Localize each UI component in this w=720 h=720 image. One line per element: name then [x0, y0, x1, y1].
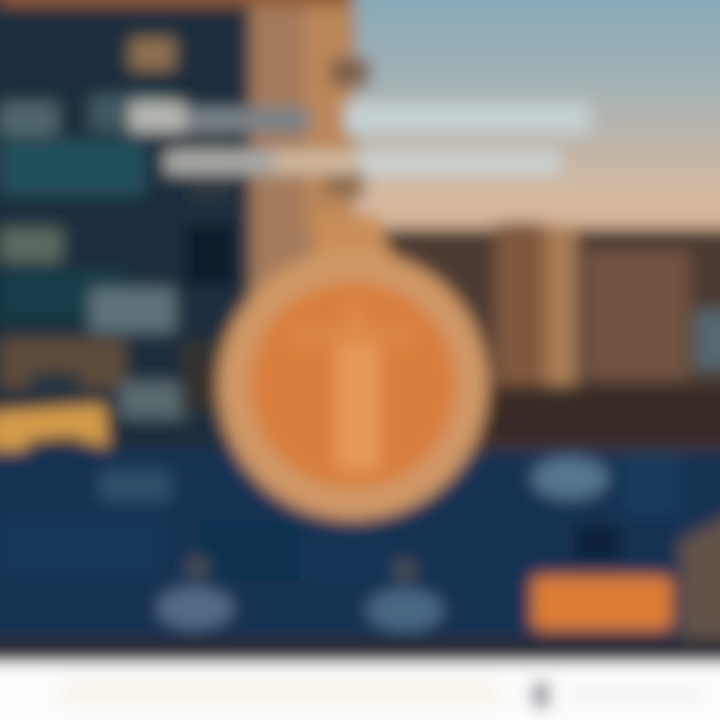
title line 1 — [130, 102, 590, 134]
background photo: yellow balcony — [0, 372, 108, 482]
badge outer ring — [218, 250, 488, 520]
dark base strip — [0, 638, 720, 662]
background photo: foreground building — [0, 0, 370, 490]
background photo: distant buildings — [340, 222, 720, 453]
badge inner disc — [250, 282, 456, 488]
icon: upper right figure — [532, 457, 608, 499]
footer text — [570, 690, 700, 700]
icon: lower middle figure — [367, 559, 443, 631]
background photo: sky — [340, 0, 720, 290]
circular badge — [218, 250, 488, 520]
icon: tower glyph — [290, 300, 415, 470]
icon: lower left figure — [157, 556, 233, 629]
title text block — [130, 102, 590, 176]
circle connector stem — [308, 215, 398, 275]
lower navy panel — [0, 450, 720, 650]
footer tint left — [60, 682, 500, 704]
white footer — [0, 664, 720, 720]
icon: footer mark — [532, 682, 550, 708]
orange button — [532, 576, 672, 630]
title line 2 — [165, 150, 560, 176]
